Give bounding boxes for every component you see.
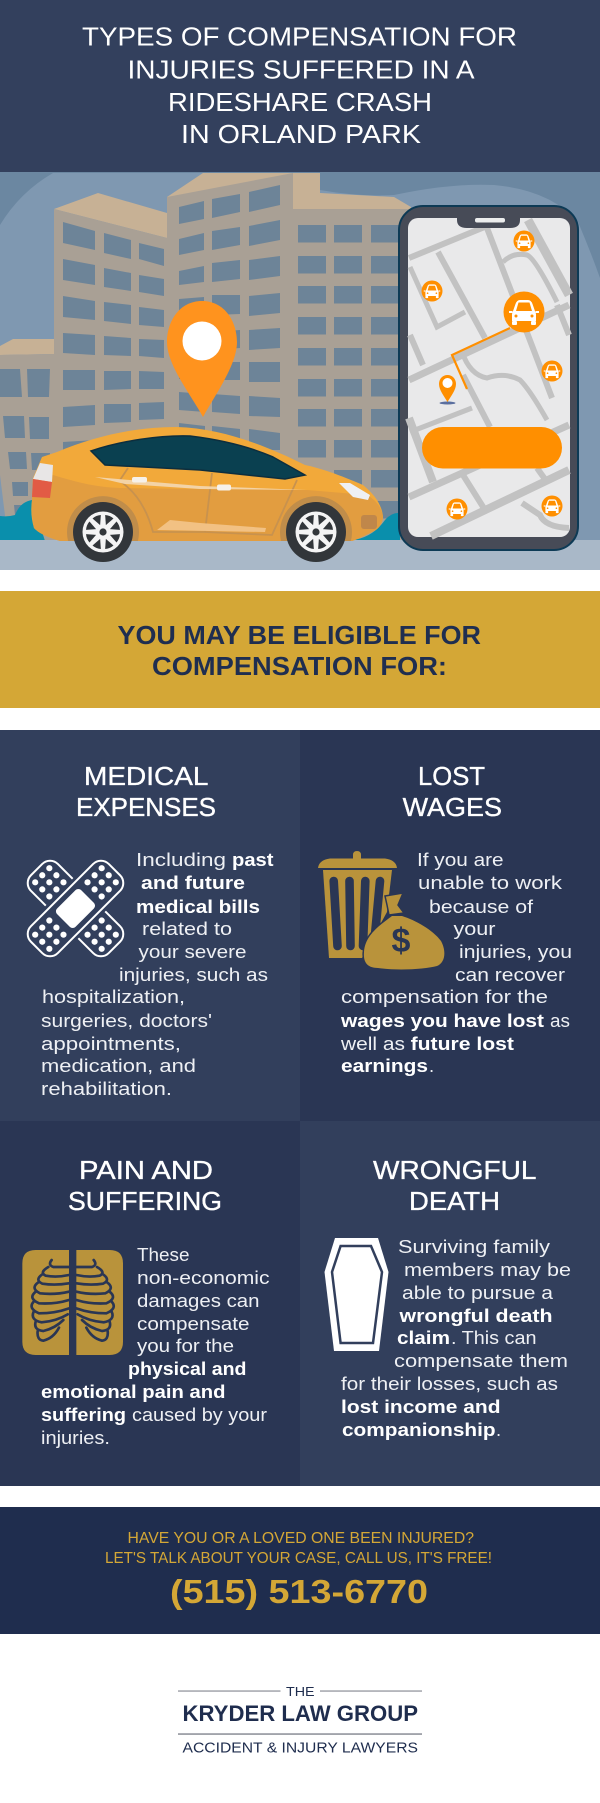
body text: claim — [397, 1327, 450, 1348]
body text: members may be — [404, 1259, 571, 1280]
phone — [399, 206, 578, 550]
body text: you for the — [137, 1335, 234, 1356]
banner heading: COMPENSATION FOR: — [152, 651, 447, 681]
illustration: city, car and phone — [0, 172, 600, 570]
heading: LOST — [418, 761, 485, 791]
body text: can recover — [455, 964, 565, 985]
body text: These — [137, 1244, 190, 1265]
heading — [68, 1155, 222, 1216]
body text: suffering — [41, 1404, 126, 1425]
body text: because of — [429, 896, 534, 917]
body text: appointments, — [41, 1033, 181, 1054]
body text — [41, 849, 274, 1099]
body text: your severe — [138, 941, 246, 962]
body text: emotional pain and — [41, 1381, 226, 1402]
body text: and future — [141, 872, 245, 893]
body text: Surviving family — [398, 1236, 551, 1257]
panel: call to action — [0, 1507, 600, 1634]
heading: EXPENSES — [76, 792, 216, 822]
body text: injuries, such as — [119, 964, 268, 985]
body text: as — [550, 1010, 570, 1031]
title: IN ORLAND PARK — [181, 119, 422, 149]
heading: WAGES — [403, 792, 502, 822]
road — [0, 540, 600, 570]
body text — [41, 1244, 270, 1448]
body text: surgeries, doctors' — [41, 1010, 212, 1031]
panel: wrongful death — [300, 1121, 600, 1486]
buildings — [0, 173, 413, 540]
panel: header — [0, 0, 600, 172]
phone number: (515) 513-6770 — [170, 1573, 428, 1610]
panel: medical expenses — [0, 730, 300, 1121]
heading: MEDICAL — [84, 761, 208, 791]
heading: WRONGFUL — [373, 1155, 536, 1185]
button — [422, 427, 562, 468]
body text: non-economic — [137, 1267, 270, 1288]
body text: compensate them — [394, 1350, 568, 1371]
title: TYPES OF COMPENSATION FOR — [82, 22, 517, 52]
map roads — [409, 220, 569, 536]
heading: SUFFERING — [68, 1186, 222, 1216]
body text: for their losses, such as — [341, 1373, 558, 1394]
body text: . This can — [451, 1327, 536, 1348]
body text: well as — [340, 1033, 405, 1054]
call to action text: HAVE YOU OR A LOVED ONE BEEN INJURED? — [128, 1530, 474, 1547]
body text: physical and — [128, 1358, 246, 1379]
heading — [76, 761, 216, 822]
car — [31, 427, 383, 562]
banner heading — [118, 620, 481, 681]
heading: PAIN AND — [79, 1155, 213, 1185]
call to action text: LET'S TALK ABOUT YOUR CASE, CALL US, IT'S FREE! — [105, 1550, 492, 1567]
panel: pain and suffering — [0, 1121, 300, 1486]
body text: damages can — [137, 1290, 260, 1311]
body text: able to pursue a — [402, 1282, 554, 1303]
body text: caused by your — [132, 1404, 267, 1425]
body text: compensation for the — [341, 986, 548, 1007]
body text: rehabilitation. — [41, 1078, 172, 1099]
icon: location pin — [167, 301, 237, 417]
body text: If you are — [417, 849, 504, 870]
body text: compensate — [137, 1313, 250, 1334]
heading — [403, 761, 502, 822]
body text: hospitalization, — [42, 986, 185, 1007]
logo: ACCIDENT & INJURY LAWYERS — [182, 1741, 418, 1757]
body text: past — [232, 849, 274, 870]
body text: injuries. — [41, 1427, 110, 1448]
body text: injuries, you — [459, 941, 572, 962]
icon: small pin — [439, 375, 456, 404]
icon: rib cage — [22, 1250, 123, 1355]
banner heading: YOU MAY BE ELIGIBLE FOR — [118, 620, 481, 650]
route line — [452, 328, 510, 389]
body text: medication, and — [41, 1055, 196, 1076]
icon: trash can and money bag — [318, 851, 444, 969]
body text: your — [454, 918, 496, 939]
body text: . — [429, 1055, 434, 1076]
icon: bandages — [20, 853, 131, 964]
icon: coffin — [324, 1238, 388, 1351]
logo: THE — [286, 1684, 315, 1699]
body text: wages you have lost — [340, 1010, 544, 1031]
body text — [340, 849, 572, 1076]
title: RIDESHARE CRASH — [168, 87, 432, 117]
icon: big car marker — [504, 292, 544, 332]
body text: earnings — [341, 1055, 428, 1076]
body text: wrongful death — [398, 1305, 552, 1326]
logo: KRYDER LAW GROUP — [182, 1701, 418, 1726]
body text: future lost — [411, 1033, 514, 1054]
panel: lost wages — [300, 730, 600, 1121]
title — [82, 22, 517, 149]
icon: trash can and money bag: $ — [392, 922, 411, 960]
body text: lost income and — [341, 1396, 500, 1417]
body text: related to — [142, 918, 232, 939]
heading — [373, 1155, 536, 1216]
bushes — [0, 500, 400, 541]
call to action text — [105, 1530, 492, 1567]
title: INJURIES SUFFERED IN A — [128, 54, 475, 84]
body text: medical bills — [136, 896, 260, 917]
logo — [178, 1684, 422, 1757]
body text: Including — [136, 849, 226, 870]
body text: unable to work — [418, 872, 563, 893]
banner: eligibility — [0, 591, 600, 708]
icon: small car markers — [422, 230, 562, 520]
body text: companionship — [342, 1419, 496, 1440]
body text — [341, 1236, 571, 1440]
body text: . — [496, 1419, 501, 1440]
heading: DEATH — [409, 1186, 500, 1216]
